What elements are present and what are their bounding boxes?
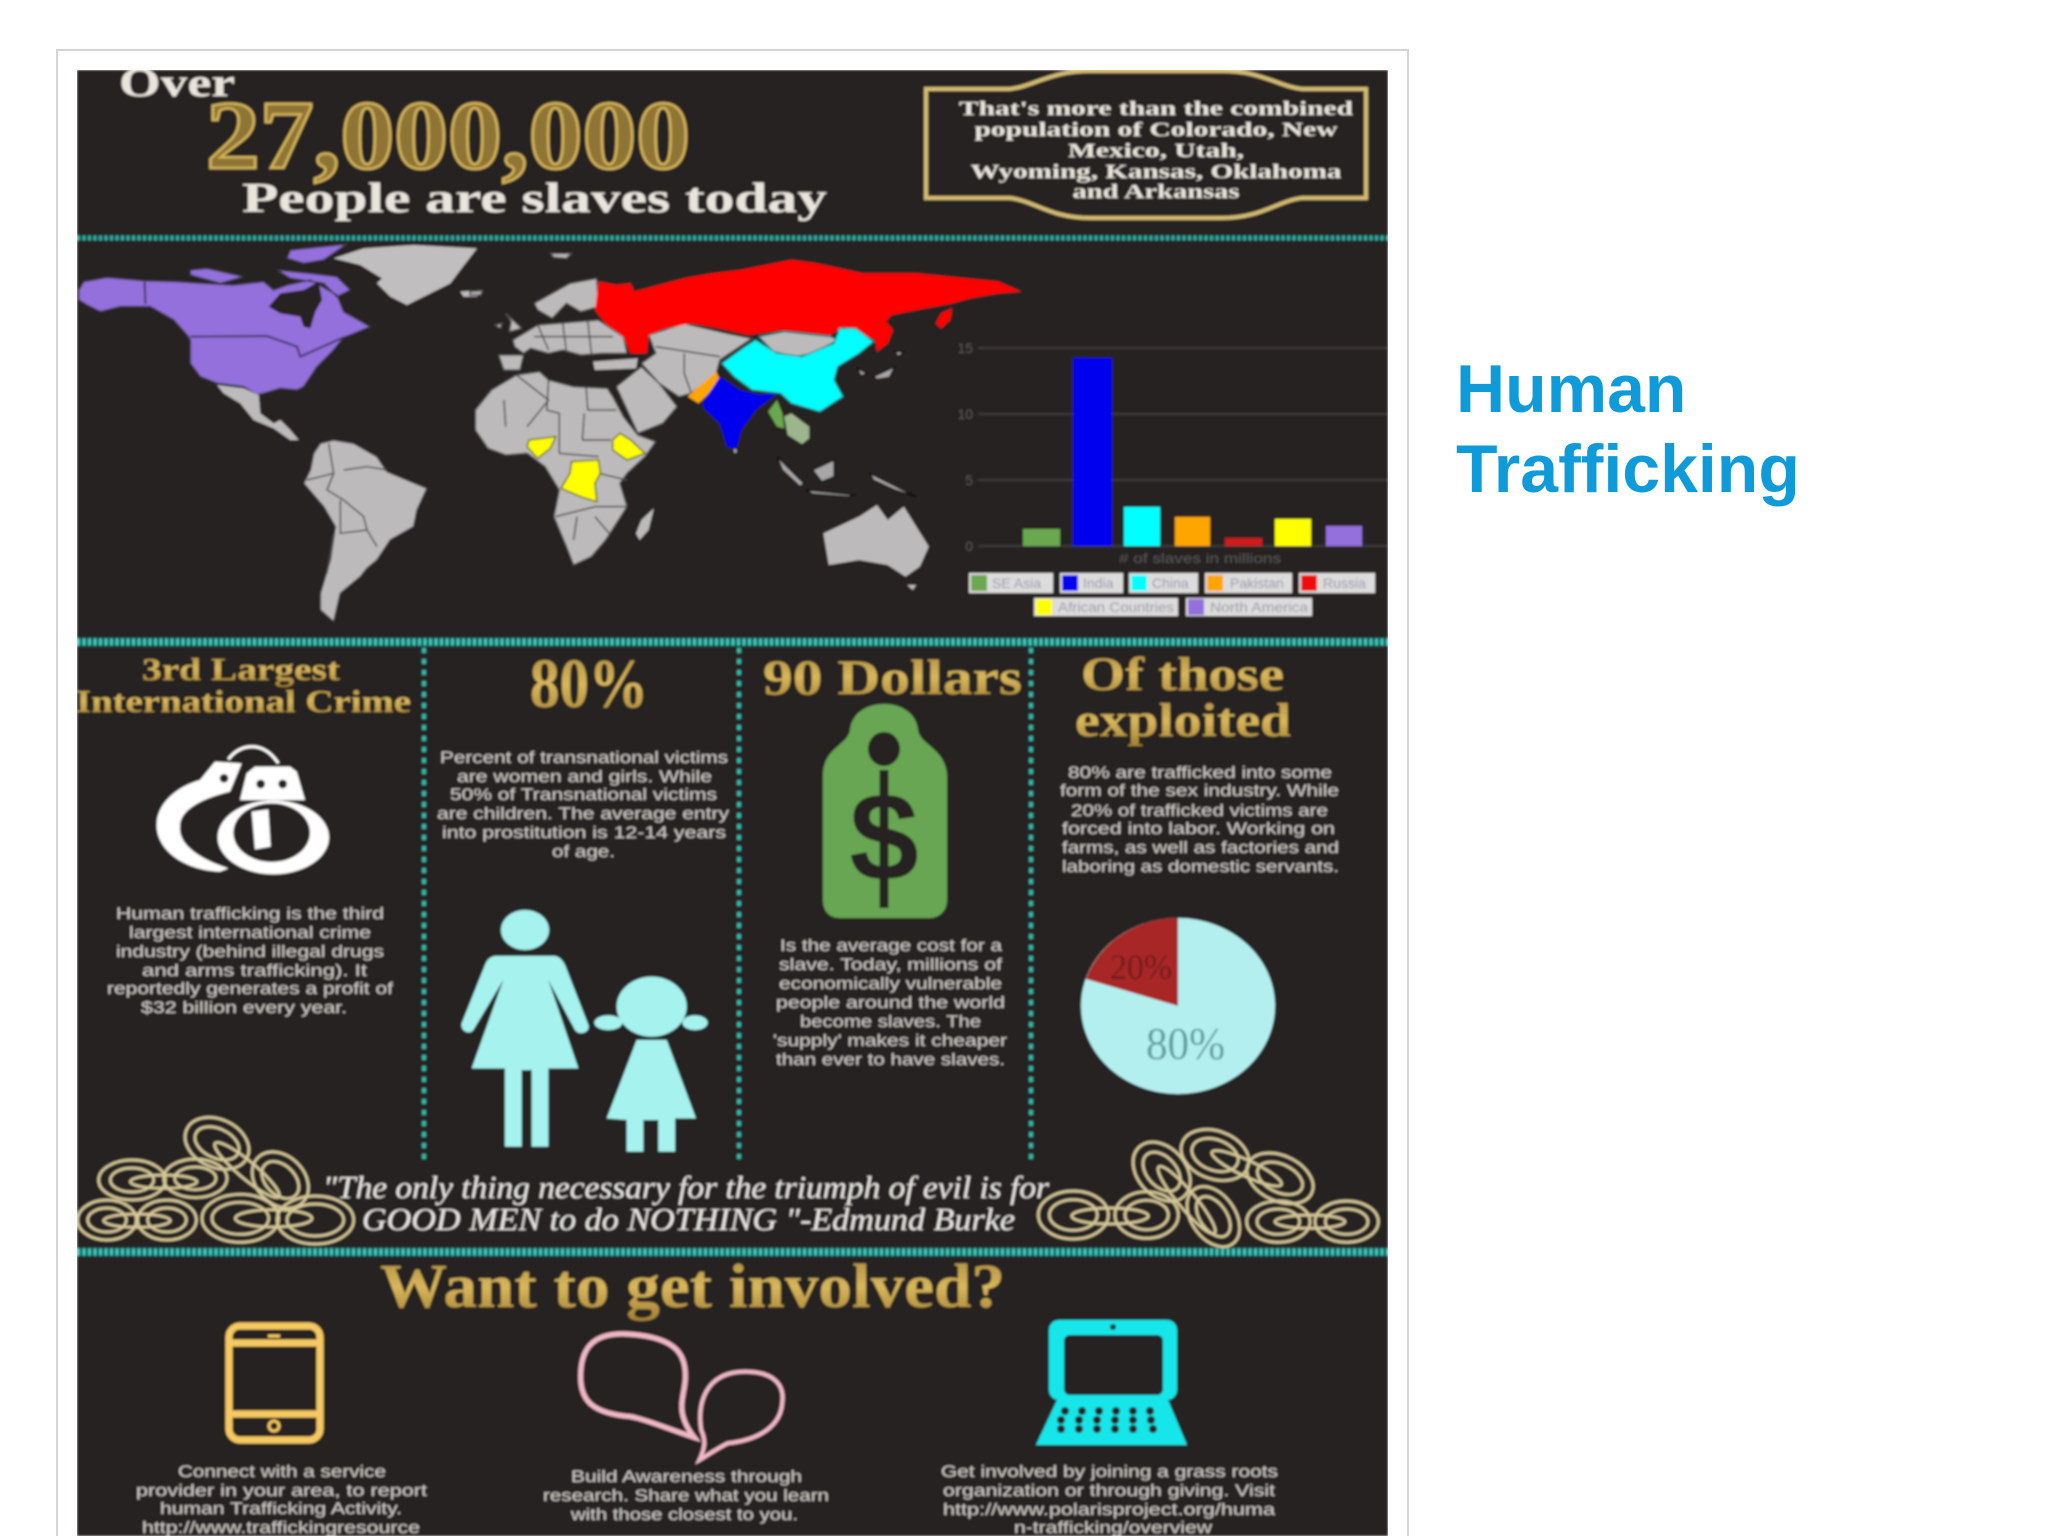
bar chart: number of slaves in millions: 10 xyxy=(957,406,973,422)
card frame xyxy=(57,50,1408,1536)
body text xyxy=(107,904,393,1017)
icon: left chains xyxy=(78,1107,354,1244)
panel: 90 dollars xyxy=(763,649,1022,1069)
chart legend: Pakistan xyxy=(1230,575,1284,591)
map: europe borders xyxy=(534,322,613,353)
chart legend xyxy=(969,573,1375,616)
chart legend: India xyxy=(1083,575,1114,591)
map: pacific asia islands xyxy=(732,352,916,497)
map: turkey xyxy=(593,358,638,370)
map: arabia xyxy=(616,367,677,433)
body text: into prostitution is 12-14 years xyxy=(442,823,726,842)
heading: exploited xyxy=(1075,694,1291,747)
map: pakistan xyxy=(688,372,720,403)
heading: International Crime xyxy=(76,683,411,719)
body text: 80% are trafficked into some xyxy=(1068,763,1332,782)
map: middle east and central asia xyxy=(641,323,752,397)
slide title xyxy=(1456,351,1800,507)
map: north america xyxy=(79,244,370,395)
map: south america borders xyxy=(307,443,387,573)
callout: population comparison: Mexico, Utah, xyxy=(1068,140,1244,162)
body text: are children. The average entry xyxy=(437,804,730,823)
icon: price tag xyxy=(823,704,947,918)
body text: reportedly generates a profit of xyxy=(107,979,393,998)
callout: population comparison xyxy=(926,71,1366,218)
body text: than ever to have slaves. xyxy=(776,1050,1005,1069)
body text: with those closest to you. xyxy=(570,1505,798,1524)
world map: americas xyxy=(79,244,482,622)
map: southeast asia xyxy=(768,400,784,428)
body text: 'supply' makes it cheaper xyxy=(773,1031,1007,1050)
chart legend: African Countries xyxy=(1058,599,1174,615)
body text: research. Share what you learn xyxy=(543,1486,829,1505)
panel: 80 percent women and girls xyxy=(437,646,730,1152)
involved column: awareness xyxy=(543,1334,829,1524)
bar chart: number of slaves in millions xyxy=(957,340,1388,566)
slide title: Trafficking xyxy=(1456,431,1800,507)
map: mexico and central america xyxy=(217,385,299,440)
involved column: organizations xyxy=(941,1320,1278,1536)
body text: slave. Today, millions of xyxy=(779,955,1002,974)
vertical dotted dividers xyxy=(424,648,1031,1164)
body text: are women and girls. While xyxy=(457,767,712,786)
heading: 90 Dollars xyxy=(763,649,1022,705)
body text: Is the average cost for a xyxy=(780,936,1003,955)
slide title: Human xyxy=(1456,351,1686,427)
map: scandinavia xyxy=(534,278,599,318)
bar chart: number of slaves in millions: 5 xyxy=(965,472,973,488)
pie chart: 80 and 20 percent: 80% xyxy=(1146,1018,1225,1069)
map: south america xyxy=(304,440,427,622)
icon: phone xyxy=(229,1326,320,1440)
headline: over 27,000,000 people are slaves today: Over xyxy=(119,60,235,105)
callout: population comparison: and Arkansas xyxy=(1072,181,1240,203)
chart legend: SE Asia xyxy=(992,575,1041,591)
body text xyxy=(437,748,730,861)
map: india xyxy=(702,377,777,450)
pie chart: 80 and 20 percent: 20% xyxy=(1110,947,1172,987)
quote: "The only thing necessary for the triumph of evil is for xyxy=(323,1169,1050,1205)
body text: laboring as domestic servants. xyxy=(1062,857,1339,876)
body text: and arms trafficking). It xyxy=(142,961,367,980)
map: africa xyxy=(475,372,656,565)
involved column: phone xyxy=(136,1326,427,1536)
heading: want to get involved: Want to get involved? xyxy=(380,1253,1005,1321)
map: africa borders xyxy=(504,375,627,540)
pie chart: 80 and 20 percent xyxy=(1081,918,1275,1094)
body text: Percent of transnational victims xyxy=(440,748,728,767)
body text: farms, as well as factories and xyxy=(1062,838,1339,857)
body text: industry (behind illegal drugs xyxy=(116,942,384,961)
body text xyxy=(136,1462,427,1536)
body text: of age. xyxy=(552,842,615,861)
body text xyxy=(773,936,1007,1069)
chart legend: North America xyxy=(1210,599,1308,615)
icon: woman and girl xyxy=(461,910,708,1152)
map: madagascar xyxy=(636,508,654,540)
body text: $32 billion every year. xyxy=(141,998,347,1017)
icon: price tag: $ xyxy=(849,768,919,907)
callout: population comparison: That's more than the combined xyxy=(959,98,1353,120)
panel: of those exploited xyxy=(1060,648,1339,1094)
body text: Get involved by joining a grass roots xyxy=(941,1462,1278,1481)
body text: Human trafficking is the third xyxy=(116,904,384,923)
body text: largest international crime xyxy=(129,923,371,942)
map: europe xyxy=(470,253,627,370)
body text: form of the sex industry. While xyxy=(1060,781,1339,800)
body text: organization or through giving. Visit xyxy=(943,1481,1275,1500)
chart legend: China xyxy=(1152,575,1189,591)
bar chart: number of slaves in millions: 15 xyxy=(957,340,973,356)
headline: over 27,000,000 people are slaves today: People are slaves today xyxy=(242,176,827,222)
callout: population comparison: Wyoming, Kansas, Oklahoma xyxy=(970,161,1342,183)
map: russia xyxy=(595,260,1022,353)
quote xyxy=(323,1169,1050,1237)
world map: eurasia, africa and oceania xyxy=(470,253,1022,590)
body text: human Trafficking Activity. xyxy=(160,1499,402,1518)
bar chart: number of slaves in millions: 0 xyxy=(965,538,973,554)
map: china xyxy=(722,328,873,412)
heading: 3rd Largest xyxy=(142,651,340,687)
map: greenland xyxy=(334,245,482,305)
icon: right chains xyxy=(1038,1120,1378,1257)
body text xyxy=(1060,763,1339,876)
body text: provider in your area, to report xyxy=(136,1481,427,1500)
headline: over 27,000,000 people are slaves today xyxy=(119,60,827,222)
body text: economically vulnerable xyxy=(779,974,1002,993)
heading xyxy=(1075,648,1291,747)
map: african countries xyxy=(527,433,645,502)
map: hudson bay xyxy=(269,282,322,328)
icon: laptop xyxy=(1036,1320,1187,1445)
icon: speech bubbles xyxy=(581,1334,783,1460)
horizontal dotted dividers xyxy=(77,238,1388,1252)
body text: become slaves. The xyxy=(800,1012,981,1031)
panel background xyxy=(77,70,1388,1536)
quote: GOOD MEN to do NOTHING "-Edmund Burke xyxy=(362,1201,1015,1237)
body text: http://www.polarisproject.org/huma xyxy=(943,1500,1276,1519)
heading: 80% xyxy=(530,646,648,723)
chart legend: Russia xyxy=(1323,575,1366,591)
heading xyxy=(76,651,411,719)
body text: 20% of trafficked victims are xyxy=(1071,801,1328,820)
map: central asia borders xyxy=(656,347,720,393)
body text xyxy=(543,1467,829,1524)
callout: population comparison: population of Colorado, New xyxy=(974,119,1338,141)
map: us borders xyxy=(145,282,344,357)
headline: over 27,000,000 people are slaves today: 27,000,000 xyxy=(206,82,690,190)
heading: Of those xyxy=(1081,648,1284,701)
panel: 3rd largest international crime xyxy=(76,651,411,1017)
body text xyxy=(941,1462,1278,1536)
body text: people around the world xyxy=(776,993,1005,1012)
icon: handcuffs xyxy=(157,747,331,876)
body text: Connect with a service xyxy=(178,1462,386,1481)
map: mongolia xyxy=(759,332,838,357)
body text: forced into labor. Working on xyxy=(1062,819,1335,838)
bar chart: number of slaves in millions: # of slaves in millions xyxy=(1119,550,1281,566)
map: australia xyxy=(823,505,929,590)
map: thailand and vietnam xyxy=(784,413,809,444)
infographic panel xyxy=(76,60,1388,1536)
body text: 50% of Transnational victims xyxy=(450,785,717,804)
body text: Build Awareness through xyxy=(571,1467,802,1486)
